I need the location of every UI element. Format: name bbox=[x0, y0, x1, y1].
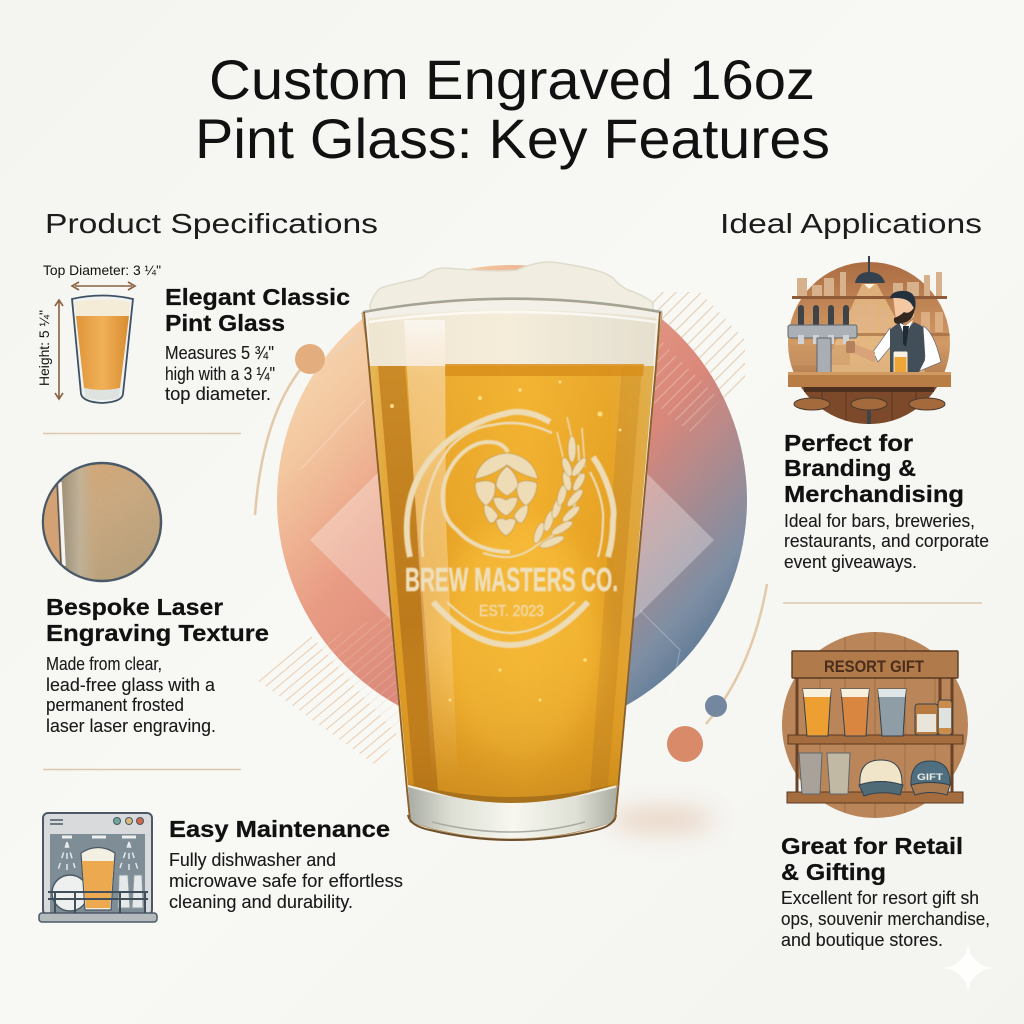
dot: slate bbox=[705, 695, 727, 717]
icon: dishwasher bbox=[39, 813, 157, 922]
top arc bbox=[332, 334, 360, 356]
description: Measures 5 ¾" bbox=[165, 343, 274, 363]
description: ops, souvenir merchandise, bbox=[781, 909, 990, 929]
description: Excellent for resort gift sh bbox=[781, 888, 979, 908]
description: permanent frosted bbox=[46, 695, 184, 715]
icon: engraving texture close-up bbox=[43, 463, 161, 581]
dot: salmon bbox=[667, 726, 703, 762]
title: Pint Glass: Key Features bbox=[195, 107, 830, 170]
arrow: height bbox=[55, 300, 63, 399]
description: event giveaways. bbox=[784, 552, 917, 572]
dimension label: top diameter: Top Diameter: 3 ¼" bbox=[43, 262, 161, 278]
hatch bottom left bbox=[257, 635, 400, 765]
outer ring arcs bbox=[407, 412, 550, 557]
heading: ideal applications: Ideal Applications bbox=[720, 208, 982, 239]
heading: Merchandising bbox=[784, 481, 964, 507]
heading: Elegant Classic bbox=[165, 284, 350, 310]
heading: Easy Maintenance bbox=[169, 816, 390, 842]
description: microwave safe for effortless bbox=[169, 871, 403, 891]
right arc bbox=[706, 584, 767, 724]
glass base bbox=[408, 787, 618, 837]
icon: bartender bbox=[788, 256, 951, 430]
hatch top right bbox=[650, 292, 745, 432]
description bbox=[784, 511, 989, 572]
icon: sparkle bbox=[944, 944, 992, 992]
title: Custom Engraved 16oz bbox=[209, 48, 815, 111]
description bbox=[781, 888, 990, 950]
heading bbox=[46, 594, 269, 646]
panel: branding and merchandising bbox=[784, 256, 989, 572]
left arc bbox=[255, 370, 300, 515]
pint glass bbox=[362, 262, 662, 840]
hop cone bbox=[475, 453, 538, 536]
left dark amber band bbox=[378, 366, 438, 790]
heading: Bespoke Laser bbox=[46, 594, 223, 620]
gradient disc bbox=[277, 265, 747, 735]
hatch over disc bbox=[300, 600, 420, 730]
icon: small pint glass bbox=[72, 296, 133, 403]
heading: product specifications: Product Specifications bbox=[45, 208, 378, 239]
foam line bbox=[445, 364, 644, 376]
description bbox=[169, 850, 403, 912]
title bbox=[195, 48, 830, 170]
heading: & Gifting bbox=[781, 859, 886, 885]
foam dome bbox=[370, 262, 653, 330]
beer body bbox=[369, 366, 654, 798]
right dark amber band bbox=[590, 366, 642, 790]
brand text: BREW MASTERS CO. bbox=[405, 561, 618, 598]
description: Ideal for bars, breweries, bbox=[784, 511, 975, 531]
sign text: RESORT GIFT bbox=[824, 657, 925, 676]
heading: Great for Retail bbox=[781, 833, 963, 859]
glass edges bbox=[364, 312, 660, 820]
description: cleaning and durability. bbox=[169, 892, 353, 912]
bubbles bbox=[390, 380, 622, 702]
central backdrop graphic bbox=[255, 265, 767, 765]
description bbox=[46, 654, 216, 736]
heading: Perfect for bbox=[784, 430, 913, 456]
hop swirl bbox=[443, 442, 510, 552]
wheat stalk bbox=[531, 417, 589, 551]
panel: easy maintenance bbox=[39, 813, 403, 922]
description: Fully dishwasher and bbox=[169, 850, 336, 870]
heading bbox=[165, 284, 350, 336]
foam in glass bbox=[368, 310, 656, 367]
heading bbox=[781, 833, 963, 885]
description: restaurants, and corporate bbox=[784, 531, 989, 551]
arrow: width bbox=[72, 282, 135, 290]
rim bbox=[363, 298, 662, 312]
description: high with a 3 ¼" bbox=[165, 364, 275, 384]
description bbox=[165, 343, 275, 404]
heading: Branding & bbox=[784, 455, 916, 481]
facet lines bbox=[300, 400, 680, 700]
panel: elegant classic pint glass bbox=[36, 262, 350, 404]
bottom arcs bbox=[433, 602, 588, 645]
amber bottom edge bbox=[410, 784, 616, 803]
dot: tan bbox=[295, 344, 325, 374]
cap text: GIFT bbox=[917, 772, 944, 782]
est text: EST. 2023 bbox=[479, 603, 544, 620]
description: and boutique stores. bbox=[781, 930, 943, 950]
left highlight band bbox=[404, 320, 458, 780]
icon: gift shelf bbox=[782, 632, 968, 820]
panel: bespoke laser engraving bbox=[43, 463, 269, 736]
heading: Pint Glass bbox=[165, 310, 285, 336]
inner glow bbox=[440, 520, 600, 760]
base outline bbox=[408, 815, 616, 840]
beer vertical tone bbox=[369, 366, 654, 798]
pale diamond bbox=[310, 340, 714, 740]
description: Made from clear, bbox=[46, 654, 162, 674]
panel: retail and gifting bbox=[781, 632, 990, 950]
base reflection bbox=[432, 822, 585, 832]
heading bbox=[784, 430, 964, 507]
engraved logo bbox=[405, 412, 618, 645]
glass body bbox=[362, 300, 662, 839]
dimension label: height: Height: 5 ¼" bbox=[36, 310, 52, 386]
glass shadow bbox=[610, 807, 714, 833]
description: laser laser engraving. bbox=[46, 716, 216, 736]
description: lead-free glass with a bbox=[46, 675, 216, 695]
heading: Engraving Texture bbox=[46, 620, 269, 646]
description: top diameter. bbox=[165, 384, 271, 404]
